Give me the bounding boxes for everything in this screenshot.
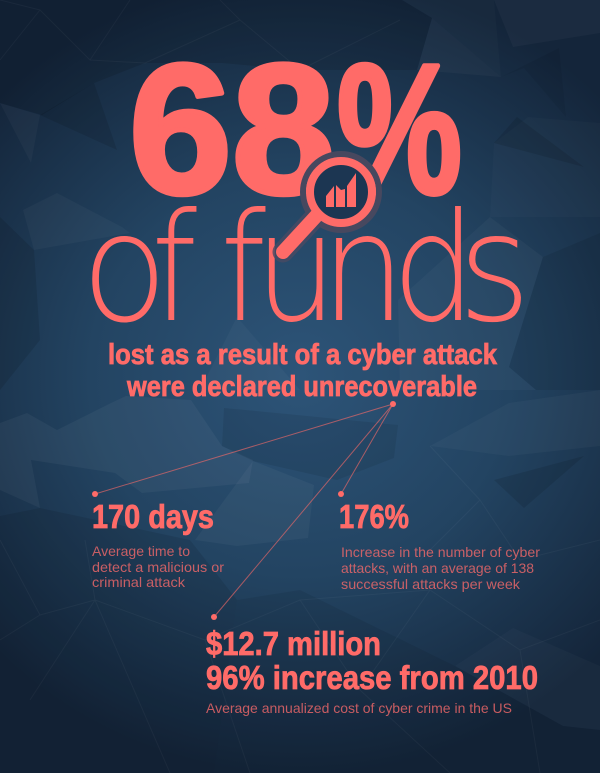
subheading: were declared unrecoverable (126, 371, 477, 403)
headline: of funds: o (81, 182, 168, 356)
stat: 170 days (92, 498, 224, 590)
headline: 68%: % (337, 27, 462, 233)
headline: 68%: 6 (129, 27, 232, 233)
headline: of funds: u (255, 182, 337, 356)
connector lines (92, 401, 396, 620)
stat: 176%: successful attacks per week (341, 576, 521, 592)
stat: 170 days: Average time to (92, 543, 190, 559)
subheading (108, 339, 498, 403)
headline: of funds: d (392, 182, 476, 356)
stat: $12.7 million: $12.7 million (206, 625, 381, 662)
icon: magnifying glass with bar chart (283, 154, 379, 252)
subheading: lost as a result of a cyber attack (108, 339, 498, 371)
stat: $12.7 million: Average annualized cost of cyber crime in the US (206, 700, 512, 716)
headline: 68% (129, 27, 462, 233)
stat: 170 days: 170 days (92, 498, 214, 535)
headline: 68%: 8 (232, 27, 335, 233)
headline: of funds (81, 182, 531, 356)
headline: of funds: f (220, 182, 266, 356)
stat: 176% (339, 498, 540, 592)
headline: of funds: n (321, 182, 406, 356)
stat: $12.7 million: 96% increase from 2010 (206, 659, 538, 696)
stat: 176%: attacks, with an average of 138 (341, 560, 534, 576)
stat: 176%: 176% (339, 498, 409, 535)
stat: $12.7 million (206, 625, 538, 716)
headline: of funds: s (458, 182, 531, 356)
stat: 176%: Increase in the number of cyber (341, 544, 540, 560)
stat: 170 days: criminal attack (92, 574, 186, 590)
stat: 170 days: detect a malicious or (92, 559, 224, 575)
headline: of funds: f (151, 182, 197, 356)
